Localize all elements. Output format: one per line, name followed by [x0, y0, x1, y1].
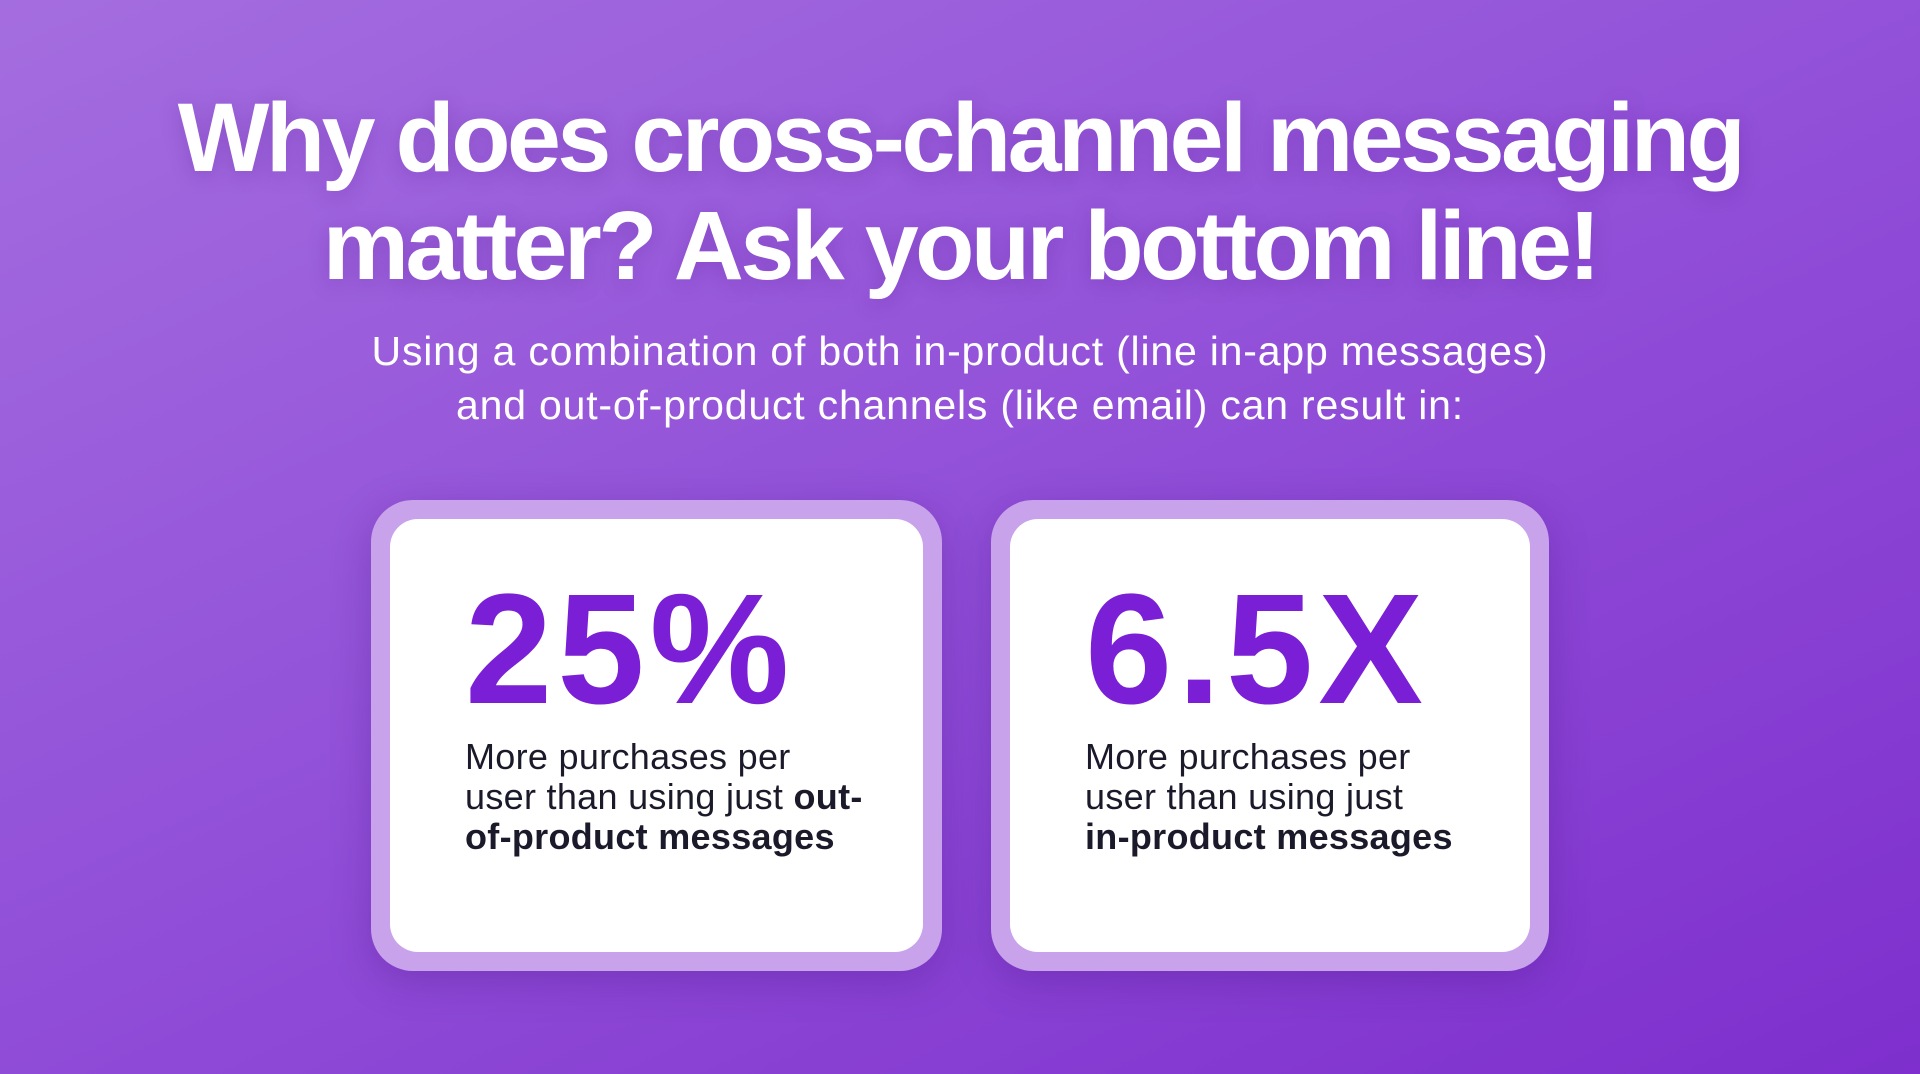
stat description [465, 736, 863, 857]
stat description: More purchases per [465, 736, 791, 777]
stat number 25%: 25% [465, 562, 794, 737]
stat number 6.5X: 6.5X [1085, 562, 1428, 737]
stat description [1085, 736, 1453, 857]
stat description: of-product messages [465, 816, 835, 857]
panel: 6.5X stat [991, 500, 1549, 971]
title [178, 83, 1742, 300]
stat description: user than using just [1085, 776, 1403, 817]
panel: 25% stat [371, 500, 942, 971]
stat description: in-product messages [1085, 816, 1453, 857]
title: Why does cross-channel messaging [178, 83, 1742, 192]
title: matter? Ask your bottom line! [323, 191, 1597, 300]
subtitle [372, 328, 1548, 428]
stat description: More purchases per [1085, 736, 1411, 777]
subtitle: Using a combination of both in-product (line in-app messages) [372, 328, 1548, 374]
subtitle: and out-of-product channels (like email) can result in: [456, 382, 1464, 428]
stat description: user than using just out- [465, 776, 863, 817]
